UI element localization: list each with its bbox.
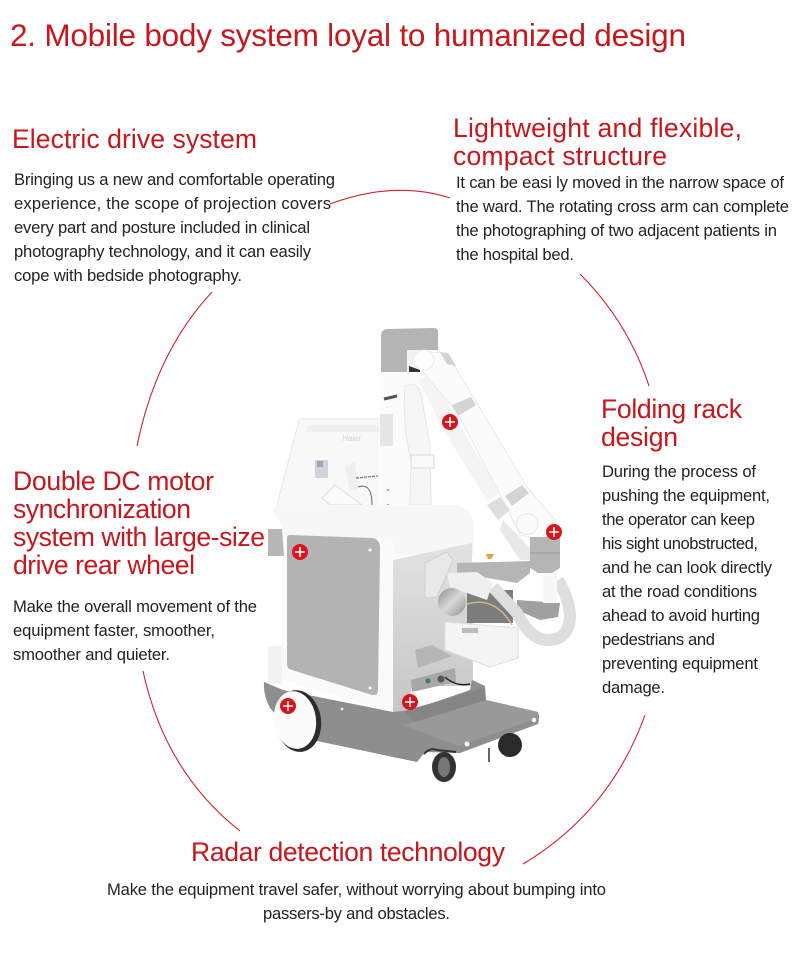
body text: the ward. The rotating cross arm can complete bbox=[456, 197, 789, 216]
heading: compact structure bbox=[453, 141, 667, 171]
hotspot: arm bbox=[442, 414, 458, 430]
heading: synchronization bbox=[13, 494, 191, 524]
heading: Radar detection technology bbox=[191, 837, 506, 867]
title: 2. Mobile body system loyal to humanized design bbox=[10, 17, 686, 53]
section: electric drive system bbox=[12, 124, 335, 285]
body text: ahead to avoid hurting bbox=[602, 606, 760, 625]
rear drive wheel bbox=[270, 687, 325, 755]
heading: Lightweight and flexible, bbox=[453, 113, 742, 143]
hotspots bbox=[280, 414, 562, 714]
body text: every part and posture included in clinical bbox=[14, 218, 310, 237]
body text bbox=[107, 880, 606, 923]
heading bbox=[453, 113, 742, 171]
arm bbox=[414, 350, 555, 560]
monitor: Haier bbox=[342, 434, 361, 443]
hotspot: body bbox=[292, 544, 308, 560]
body text bbox=[13, 597, 257, 664]
body text: equipment faster, smoother, bbox=[13, 621, 215, 640]
X-ray tube head and collimator bbox=[425, 537, 570, 667]
base platform bbox=[264, 680, 539, 762]
heading: design bbox=[601, 422, 678, 452]
hotspot: radar bbox=[402, 694, 418, 710]
body text bbox=[602, 462, 773, 697]
body text bbox=[14, 170, 335, 285]
body text: the operator can keep bbox=[602, 510, 755, 529]
body text: his sight unobstructed, bbox=[602, 534, 758, 553]
heading: drive rear wheel bbox=[13, 550, 195, 580]
body text: experience, the scope of projection covers bbox=[14, 194, 331, 213]
hotspot: joint bbox=[546, 524, 562, 540]
body text: photography technology, and it can easily bbox=[14, 242, 312, 261]
main body bbox=[268, 505, 474, 712]
body text: the photographing of two adjacent patients in bbox=[456, 221, 777, 240]
heading bbox=[13, 466, 265, 580]
column head bbox=[381, 328, 438, 372]
body text: passers-by and obstacles. bbox=[263, 904, 450, 923]
body text: cope with bedside photography. bbox=[14, 266, 242, 285]
body text: pushing the equipment, bbox=[602, 486, 770, 505]
body text: Make the overall movement of the bbox=[13, 597, 257, 616]
section: radar detection technology bbox=[107, 837, 606, 923]
front casters bbox=[424, 733, 522, 782]
body text: pedestrians and bbox=[602, 630, 715, 649]
connecting arcs bbox=[137, 190, 649, 864]
body text: smoother and quieter. bbox=[13, 645, 170, 664]
body text: the hospital bed. bbox=[456, 245, 574, 264]
column bbox=[378, 372, 434, 508]
heading: Double DC motor bbox=[13, 466, 214, 496]
heading: system with large-size bbox=[13, 522, 265, 552]
monitor bbox=[278, 419, 381, 508]
hotspot: wheel bbox=[280, 698, 296, 714]
section: double DC motor bbox=[13, 466, 265, 664]
body text: During the process of bbox=[602, 462, 756, 481]
body text: at the road conditions bbox=[602, 582, 757, 601]
heading: Folding rack bbox=[601, 394, 743, 424]
body text: It can be easi ly moved in the narrow space of bbox=[456, 173, 784, 192]
body text: preventing equipment bbox=[602, 654, 758, 673]
body text: damage. bbox=[602, 678, 665, 697]
section: lightweight structure bbox=[453, 113, 789, 264]
body text: Make the equipment travel safer, without worrying about bumping into bbox=[107, 880, 606, 899]
body text bbox=[456, 173, 789, 264]
body text: and he can look directly bbox=[602, 558, 773, 577]
heading bbox=[601, 394, 743, 452]
section: folding rack design bbox=[601, 394, 773, 697]
body text: Bringing us a new and comfortable operating bbox=[14, 170, 335, 189]
heading: Electric drive system bbox=[12, 124, 257, 154]
illustration: mobile X-ray machine bbox=[264, 328, 570, 782]
